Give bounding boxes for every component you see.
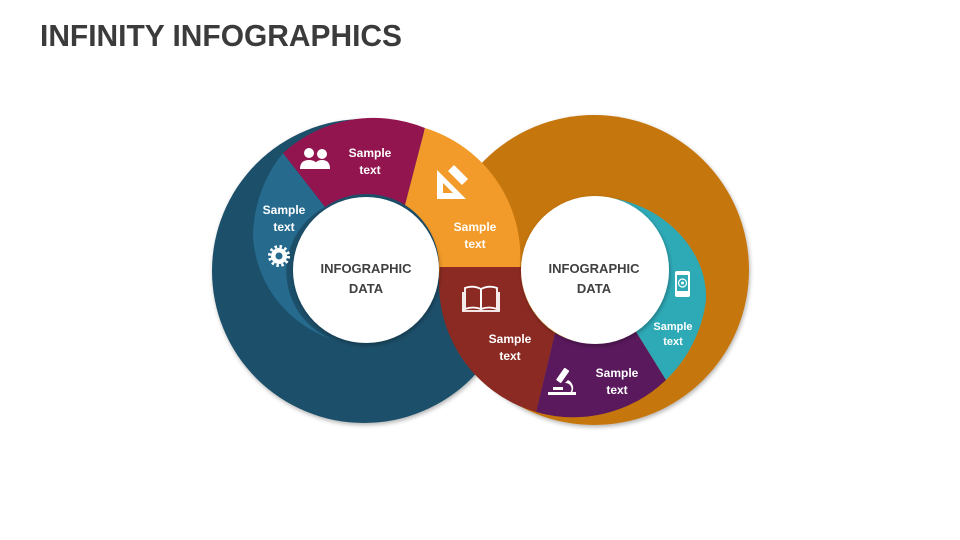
icon: gear bbox=[270, 246, 288, 266]
right outer ring: dark orange bbox=[439, 115, 749, 425]
segment: dark purple bbox=[536, 330, 666, 417]
center circle right: DATA bbox=[577, 281, 612, 296]
segment: orange: Sample bbox=[454, 220, 497, 234]
segment: orange bbox=[405, 128, 520, 267]
segment: maroon bbox=[439, 267, 555, 412]
icon: people bbox=[300, 148, 330, 169]
icon: book bbox=[463, 287, 499, 311]
segment: purple: Sample bbox=[349, 146, 392, 160]
center circle right bbox=[521, 196, 669, 344]
title: INFINITY INFOGRAPHICS bbox=[40, 18, 402, 53]
segment: teal: text bbox=[663, 336, 683, 348]
center circle left: DATA bbox=[349, 281, 384, 296]
segment: teal bbox=[612, 198, 706, 380]
center circle left: INFOGRAPHIC bbox=[320, 261, 412, 276]
icon: set square bbox=[437, 165, 468, 199]
segment: purple: text bbox=[359, 163, 381, 177]
left outer ring: dark blue bbox=[212, 119, 516, 423]
segment: maroon: Sample bbox=[489, 332, 532, 346]
segment: blue: text bbox=[273, 220, 295, 234]
segment: dark purple: text bbox=[606, 383, 628, 397]
icon: phone bbox=[675, 271, 690, 297]
segment: maroon: text bbox=[499, 349, 521, 363]
center circle left bbox=[293, 197, 439, 343]
segment: orange: text bbox=[464, 237, 486, 251]
segment: blue: Sample bbox=[263, 203, 306, 217]
segment: teal: Sample bbox=[653, 321, 693, 333]
center circle right: INFOGRAPHIC bbox=[548, 261, 640, 276]
segment: purple bbox=[283, 118, 425, 207]
segment: blue bbox=[253, 153, 345, 343]
icon: microscope bbox=[548, 368, 576, 395]
infinity diagram bbox=[212, 115, 749, 425]
segment: dark purple: Sample bbox=[596, 366, 639, 380]
